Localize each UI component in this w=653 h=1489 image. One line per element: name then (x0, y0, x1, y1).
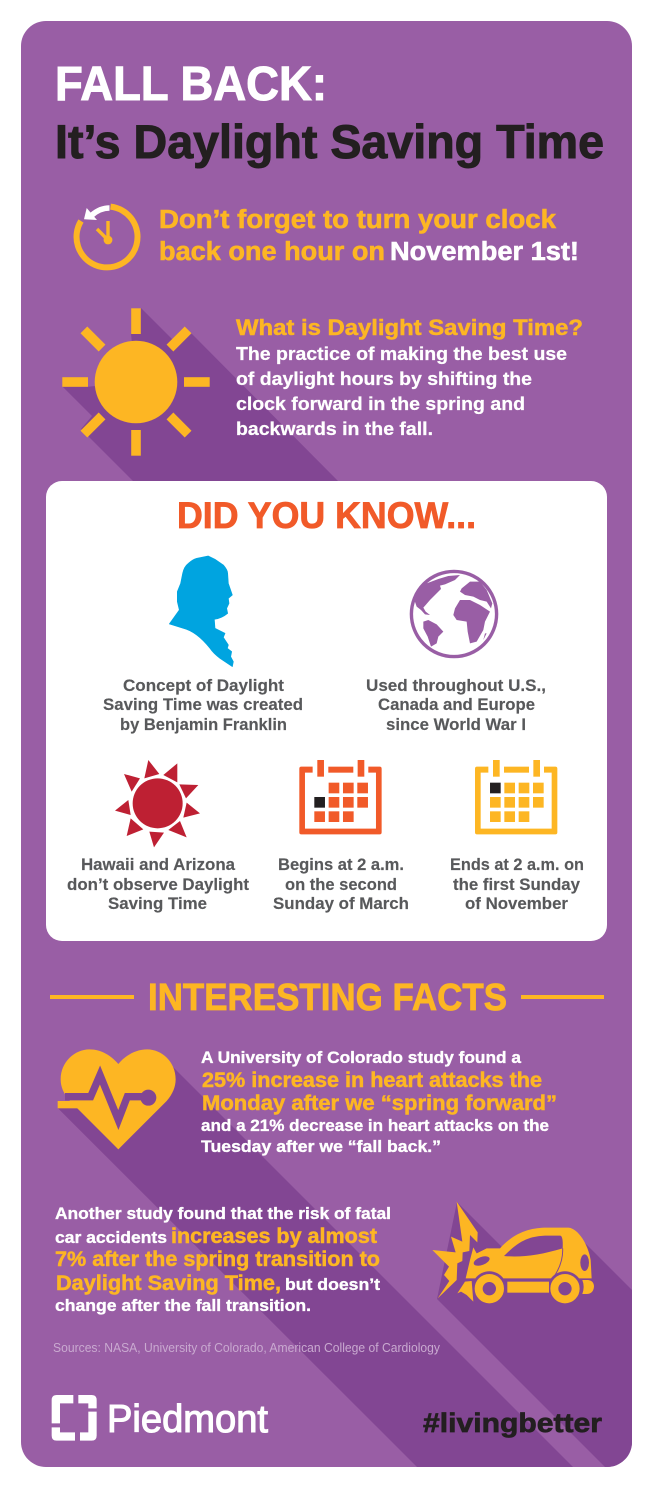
fact: car accidents text (55, 1205, 391, 1315)
fact: heart attacks text: 25% increase in heart attacks the (202, 1069, 542, 1092)
caption: world usage (366, 677, 546, 734)
caption: Franklin: by Benjamin Franklin (120, 716, 287, 734)
fact: heart attacks text (201, 1049, 557, 1156)
caption: begins: on the second (285, 876, 397, 894)
fact: car accidents text: 7% after the spring transition to (55, 1248, 380, 1271)
caption: ends: of November (465, 895, 569, 913)
what is daylight saving time text: The practice of making the best use (236, 343, 567, 364)
heart long shadow (58, 1067, 575, 1469)
caption: world usage: Canada and Europe (378, 696, 535, 714)
icon: clock turning back (77, 207, 138, 267)
what is daylight saving time text: of daylight hours by shifting the (236, 368, 532, 389)
fact: heart attacks text: A University of Colorado study found a (201, 1049, 522, 1067)
fact: car accidents text: Another study found that the risk of fatal (55, 1205, 391, 1223)
caption: Hawaii and Arizona: Hawaii and Arizona (81, 856, 236, 874)
caption: world usage: since World War I (386, 716, 526, 734)
fact: heart attacks text: Tuesday after we “fall back.” (201, 1138, 441, 1156)
caption: Hawaii and Arizona (67, 856, 250, 913)
panel: did you know card (46, 481, 607, 941)
fact: car accidents text: car accidents (55, 1229, 167, 1247)
fact: heart attacks text: Monday after we “spring forward” (202, 1092, 557, 1115)
icon: red sun (115, 760, 200, 847)
logo: Piedmont: Piedmont (107, 1398, 268, 1441)
sources: Sources: NASA, University of Colorado, American College of Cardiology (53, 1340, 440, 1355)
reminder text: November 1st! (390, 238, 579, 266)
icon: globe (411, 571, 497, 657)
caption: ends: the first Sunday (453, 876, 581, 894)
what is daylight saving time text: What is Daylight Saving Time? (236, 315, 583, 340)
logo: Piedmont (52, 1395, 268, 1441)
car long shadow (437, 1202, 634, 1469)
caption: begins (273, 856, 409, 913)
fact: car accidents text: change after the fall transition. (55, 1297, 311, 1315)
reminder text: back one hour on (159, 238, 385, 266)
icon: sun (62, 308, 210, 456)
heading: did you know: DID YOU KNOW... (177, 495, 476, 536)
caption: world usage: Used throughout U.S., (366, 677, 546, 695)
what is daylight saving time text: backwards in the fall. (236, 418, 433, 439)
icon: heart with pulse (58, 1049, 176, 1149)
fact: heart attacks text: and a 21% decrease in heart attacks on the (201, 1117, 549, 1135)
what is daylight saving time text (236, 315, 583, 439)
icon: orange calendar (299, 760, 382, 834)
fact: car accidents text: Daylight Saving Time, (56, 1272, 281, 1295)
icon: Benjamin Franklin silhouette (169, 556, 233, 667)
title (55, 58, 604, 168)
caption: begins: Begins at 2 a.m. (278, 856, 404, 874)
caption: ends: Ends at 2 a.m. on (450, 856, 584, 874)
title: It’s Daylight Saving Time (55, 115, 604, 168)
caption: Hawaii and Arizona: Saving Time (108, 895, 207, 913)
fact: car accidents text: increases by almost (171, 1225, 377, 1248)
heading: interesting facts: INTERESTING FACTS (148, 977, 507, 1019)
icon: crashed car (432, 1202, 594, 1302)
reminder text (159, 206, 579, 266)
icon: yellow calendar (475, 760, 557, 834)
caption: Franklin: Concept of Daylight (123, 677, 285, 695)
title: FALL BACK: (55, 58, 327, 111)
hashtag: #livingbetter (423, 1408, 603, 1438)
what is daylight saving time text: clock forward in the spring and (236, 393, 525, 414)
reminder text: Don’t forget to turn your clock (159, 206, 557, 234)
caption: Franklin: Saving Time was created (103, 696, 303, 714)
caption: begins: Sunday of March (273, 895, 409, 913)
sun long shadow (63, 308, 338, 481)
caption: Franklin (103, 677, 303, 734)
caption: ends (450, 856, 584, 913)
fact: car accidents text: but doesn’t (285, 1276, 381, 1294)
caption: Hawaii and Arizona: don’t observe Daylight (67, 876, 250, 894)
